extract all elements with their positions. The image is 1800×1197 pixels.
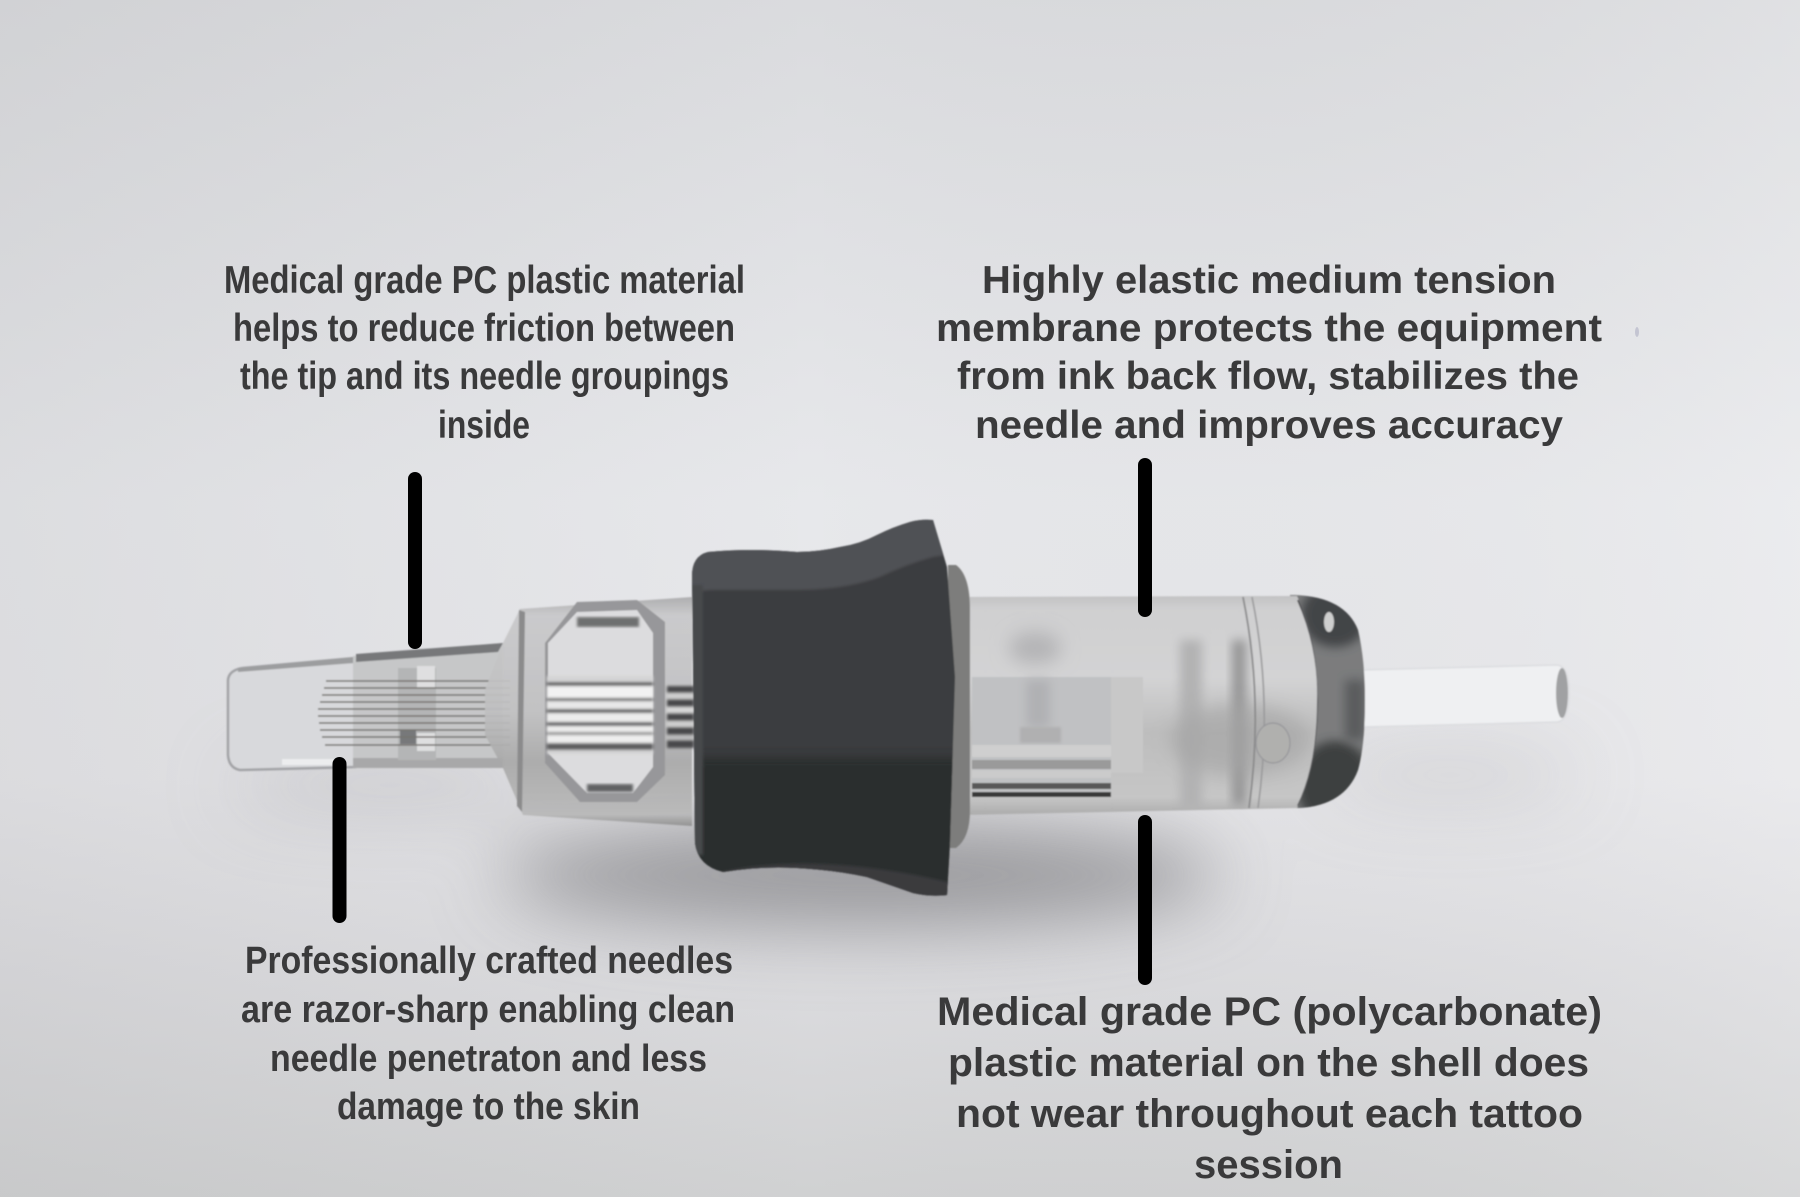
text block: needles	[241, 940, 735, 1128]
text block: shell: not wear throughout each tattoo	[956, 1092, 1583, 1136]
text block: tip material	[224, 259, 745, 447]
text block: membrane: needle and improves accuracy	[975, 404, 1563, 447]
collar and window body	[485, 597, 692, 826]
needle guide section	[353, 643, 503, 768]
text block: membrane: Highly elastic medium tension	[982, 259, 1556, 302]
text block: shell: Medical grade PC (polycarbonate)	[937, 990, 1602, 1034]
pointer line: tip material	[408, 479, 422, 642]
rubber grip flange	[948, 565, 970, 848]
text block: membrane: from ink back flow, stabilizes the	[957, 355, 1579, 398]
text block: tip material: the tip and its needle groupings	[240, 355, 729, 398]
text block: tip material: Medical grade PC plastic material	[224, 259, 745, 302]
text block: membrane	[936, 259, 1602, 447]
text block: tip material: inside	[438, 404, 530, 447]
speck	[1635, 327, 1639, 337]
steel needle bar	[547, 676, 694, 754]
dark end cap	[1290, 594, 1366, 809]
pointer line: shell	[1138, 822, 1152, 978]
needle grouping	[318, 681, 510, 745]
plunger rod	[1362, 665, 1569, 727]
pointer line: needles	[332, 764, 346, 916]
text block: shell: plastic material on the shell does	[948, 1041, 1589, 1085]
text block: needles: are razor-sharp enabling clean	[241, 989, 735, 1031]
text block: shell: session	[1194, 1143, 1343, 1187]
transparent tip	[228, 657, 355, 770]
pointer line: membrane	[1138, 465, 1152, 610]
tattoo needle cartridge	[228, 515, 1569, 905]
text block: shell	[937, 990, 1602, 1187]
text block: tip material: helps to reduce friction between	[233, 307, 735, 350]
object shadow	[230, 751, 1580, 927]
main barrel	[955, 590, 1325, 820]
text block: needles: Professionally crafted needles	[245, 940, 733, 982]
text block: needles: damage to the skin	[337, 1086, 640, 1128]
text block: needles: needle penetraton and less	[270, 1038, 707, 1080]
text block: membrane: membrane protects the equipment	[936, 307, 1602, 350]
rubber grip	[685, 515, 965, 905]
